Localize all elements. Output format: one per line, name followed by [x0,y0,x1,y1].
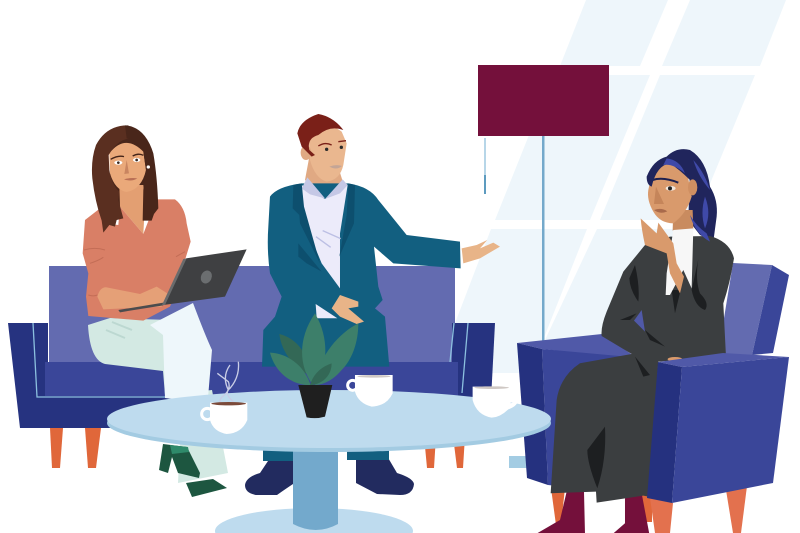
cup with steam [202,362,247,434]
woman with laptop [83,125,247,497]
woman in black gown [536,149,734,533]
green shoes [159,444,227,497]
forearms and hands [97,287,167,309]
potted plant [270,313,358,418]
laptop [118,249,247,312]
white collar [666,228,693,295]
resting hand [668,357,682,362]
cup behind plant [348,375,393,407]
window panes [436,0,786,373]
back hair [688,170,717,242]
earring [147,165,150,169]
face [109,143,146,192]
lower trousers [263,440,389,461]
neck and chest [119,185,145,234]
cup at right [473,386,518,418]
coffee cups [202,362,518,434]
back hair [110,133,155,207]
gown folds [587,259,707,488]
jacket and trousers [262,183,461,367]
hair locks [92,125,158,233]
boots [536,492,649,533]
navy shoes [245,456,414,495]
trousers [88,303,228,483]
resting hand [332,295,364,324]
sweater [83,199,191,321]
floor lamp [478,65,609,468]
gap between arm and body [634,310,645,332]
raised hand [641,218,684,293]
armchair right arm and front legs [647,353,789,533]
lapels [293,183,355,272]
face [648,164,692,223]
shirt [302,177,348,318]
armchair back and left arm [517,263,789,525]
ear [688,179,697,195]
gown [551,236,734,503]
man in teal suit [245,114,500,495]
gesturing hand [462,240,500,263]
neck [305,157,343,200]
pot [298,385,332,418]
leaves [270,313,358,385]
head [297,114,347,182]
front hair [647,149,710,242]
sofa [8,266,495,468]
coffee table [107,390,551,533]
neck [673,210,693,231]
